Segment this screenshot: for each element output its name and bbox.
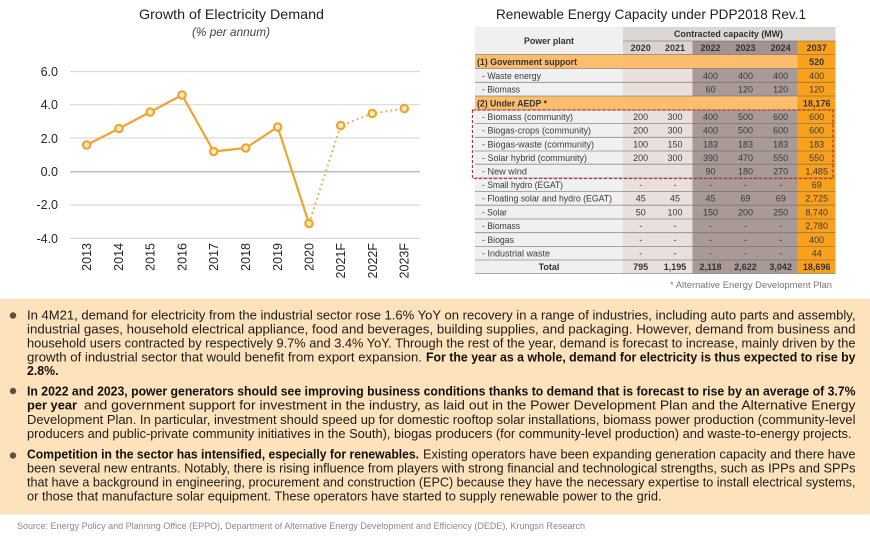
row: biomass community: 400 [703,112,718,122]
row: solar hybrid [482,153,824,163]
paragraph: 2022 and 2023 outlook: per year [27,398,77,413]
row: solar: 150 [703,207,718,217]
table header: 2021 [665,43,685,53]
y axis labels: 6.0 [41,65,58,79]
row: biomass AEDP: - [779,221,782,231]
row: biogas crops: - Biogas-crops (community) [482,126,591,136]
row: waste energy [482,71,824,81]
y axis labels: 0.0 [41,165,58,179]
row: biomass AEDP: - [744,221,747,231]
row: biomass: 120 [809,84,824,94]
x axis labels: 2019 [271,243,285,271]
row: biomass community: 600 [773,112,788,122]
paragraph: 4M21 demand: household users contracted by respectively 9.7% and 3.4% YoY. Through the rest of the year, demand is forecast to increase, mainly driven by the [27,335,856,350]
row: solar: 200 [738,207,753,217]
row: biomass AEDP: - [639,221,642,231]
x axis labels: 2016 [176,243,190,271]
row: biomass community: 300 [667,112,683,122]
chart title: (% per annum) [192,25,270,39]
row: waste energy: 400 [738,71,753,81]
row: biomass community: - Biomass (community) [482,112,573,122]
paragraph: 4M21 demand: growth of industrial sector that would benefit from export expansion. [27,349,422,364]
paragraph: 4M21 demand [10,307,856,378]
paragraph: 4M21 demand: In 4M21, demand for electricity from the industrial sector rose 1.6% YoY on recovery in a range of industries, including auto parts and assembly, [27,307,856,322]
row: waste energy: 400 [773,71,788,81]
row: government support [477,57,824,67]
row: biogas waste: 183 [703,139,718,149]
row: biomass AEDP: - [709,221,712,231]
row: biogas waste: 150 [667,139,683,149]
row: industrial waste: - [709,248,712,258]
row: biogas crops: 300 [667,126,683,136]
row: total: 795 [633,262,648,272]
table header: 2020 [631,43,651,53]
paragraph: competition [10,447,856,504]
row: solar hybrid: 550 [809,153,824,163]
row: solar: 100 [667,207,683,217]
paragraph: competition: that have a background in engineering, procurement and construction (EPC) because they have the necessary expertise to install electrical systems, [27,475,856,490]
x axis labels [80,243,412,278]
row: biogas crops: 600 [773,126,788,136]
row: biogas: 400 [809,235,824,245]
row: solar hybrid: 200 [633,153,648,163]
paragraph: competition: Existing operators have been expanding generation capacity and there have [423,447,856,462]
row: floating solar and hydro: 69 [776,194,786,204]
row: total: 18,696 [803,262,830,272]
row: small hydro: - [779,180,782,190]
x axis labels: 2020 [302,243,316,271]
row: small hydro: 69 [812,180,822,190]
row: solar: 50 [636,207,646,217]
row: floating solar and hydro: 69 [740,194,751,204]
row: new wind [482,166,828,176]
y axis labels [36,65,58,246]
row: new wind: 270 [773,166,788,176]
actual data line [87,95,309,224]
x axis labels: 2018 [239,243,253,271]
row: total: 1,195 [664,262,686,272]
row: small hydro: - Small hydro (EGAT) [482,180,563,190]
row: industrial waste: - Industrial waste [482,248,550,258]
row: solar hybrid: 550 [773,153,788,163]
row: waste energy: 400 [703,71,718,81]
row: biogas crops [482,126,824,136]
row: industrial waste [482,248,822,258]
y axis labels: -4.0 [36,232,58,246]
row: total [539,262,830,272]
row: biomass: 120 [773,84,788,94]
table header: Power plant [524,36,574,46]
row: biogas crops: 600 [809,126,824,136]
paragraph: 4M21 demand: 2.8%. [27,363,58,378]
row: total: 3,042 [769,262,792,272]
row: biomass: 120 [738,84,753,94]
paragraph: competition: or those that manufacture solar equipment. These operators have started to supply renewable power to the grid. [27,489,662,504]
row: industrial waste: - [744,248,747,258]
x axis labels: 2017 [207,243,221,271]
chart title: Growth of Electricity Demand [139,6,324,22]
row: biogas waste: 100 [633,139,648,149]
row: under AEDP [477,98,830,108]
x axis labels: 2023F [398,243,412,278]
table header: 2022 [700,43,721,53]
row: biomass: - Biomass [482,84,520,94]
row: biogas: - Biogas [482,235,514,245]
row: biomass: 60 [705,84,716,94]
forecast dotted line [309,108,404,224]
row: solar [482,207,828,217]
row: government support: (1) Government support [477,57,577,67]
row: biogas: - [709,235,712,245]
row: solar hybrid: 390 [703,153,718,163]
table header: 2023 [735,43,756,53]
row: biomass community: 600 [809,112,824,122]
row: small hydro: - [709,180,712,190]
source note: Source: Energy Policy and Planning Office (EPPO), Department of Alternative Energy Development and Efficiency (DEDE), Krungsri Research [17,521,585,532]
row: under AEDP: 18,176 [803,98,830,108]
row: biogas: - [639,235,642,245]
row: floating solar and hydro: 45 [636,194,646,204]
row: industrial waste: - [639,248,642,258]
y axis labels: 2.0 [41,132,58,146]
row: waste energy: - Waste energy [482,71,541,81]
row: biomass AEDP: - [674,221,676,231]
row: biomass community: 200 [633,112,648,122]
row: total: 2,622 [734,262,757,272]
paragraph: 4M21 demand: For the year as a whole, demand for electricity is thus expected to rise by [426,349,856,364]
row: small hydro: - [639,180,642,190]
row: small hydro [482,180,822,190]
row: new wind: 1,485 [805,166,828,176]
table title: Renewable Energy Capacity under PDP2018 Rev.1 [496,6,806,22]
row: floating solar and hydro [482,194,828,204]
row: solar hybrid: 470 [738,153,753,163]
row: new wind: 90 [705,166,716,176]
row: under AEDP: (2) Under AEDP * [477,98,547,108]
row: industrial waste: - [779,248,782,258]
row: industrial waste: - [674,248,676,258]
table header [524,29,827,53]
paragraph: competition: Competition in the sector has intensified, especially for renewables. [27,447,419,462]
paragraph: 2022 and 2023 outlook: producers and public-private community initiatives in the South), biogas producers (for community-level production) and waste-to-energy projects. [27,426,852,441]
row: biogas waste [482,139,824,149]
table header: 2037 [807,43,827,53]
row: small hydro: - [744,180,747,190]
table: renewable energy capacity [475,27,836,274]
row: biomass AEDP: - Biomass [482,221,520,231]
x axis labels: 2022F [366,243,380,278]
data point markers [83,91,408,227]
row: biogas: - [674,235,676,245]
x axis labels: 2013 [80,243,94,271]
row: floating solar and hydro: 2,725 [805,194,828,204]
x axis labels: 2021F [334,243,348,278]
row: biogas: - [744,235,747,245]
row: floating solar and hydro: - Floating solar and hydro (EGAT) [482,194,612,204]
row: biogas crops: 400 [703,126,718,136]
y axis labels: -2.0 [36,198,58,212]
row: biogas waste: - Biogas-waste (community) [482,139,594,149]
row: biogas: - [779,235,782,245]
row: solar: 8,740 [805,207,828,217]
row: floating solar and hydro: 45 [705,194,716,204]
row: government support: 520 [809,57,824,67]
row: total: Total [539,262,559,272]
table header: Contracted capacity (MW) [674,29,783,39]
paragraph: 2022 and 2023 outlook: Development Plan. In particular, investment should speed up for domestic rooftop solar installations, biomass power production (community-level [27,412,856,427]
row: biomass community [482,112,824,122]
paragraph: 2022 and 2023 outlook [10,384,856,441]
row: waste energy: 400 [809,71,824,81]
x axis labels: 2014 [112,243,126,271]
table header: 2024 [771,43,791,53]
row: floating solar and hydro: 45 [670,194,680,204]
chart title [139,6,324,39]
row: biogas waste: 183 [773,139,788,149]
row: biomass AEDP: 2,780 [805,221,828,231]
row: industrial waste: 44 [812,248,822,258]
y axis labels: 4.0 [41,98,58,112]
paragraph: competition: been several new entrants. Notably, there is rising influence from players with strong financial and technological strengths, such as IPPs and SPPs [27,461,856,476]
row: biomass community: 500 [738,112,753,122]
row: solar hybrid: - Solar hybrid (community) [482,153,587,163]
footnote: * Alternative Energy Development Plan [670,280,832,291]
row: biomass AEDP [482,221,828,231]
dashed highlight box [472,110,833,178]
x axis labels: 2015 [144,243,158,271]
panel: commentary [0,299,870,514]
row: new wind: - New wind [482,166,527,176]
row: biogas waste: 183 [738,139,753,149]
row: small hydro: - [674,180,676,190]
row: total: 2,118 [699,262,722,272]
paragraph: 4M21 demand: industrial gases, household electrical appliance, food and beverages, building supplies, and packaging. However, demand from business and [27,321,856,336]
line chart: growth of electricity demand [36,65,420,278]
row: solar: - Solar [482,207,507,217]
row: biogas crops: 200 [633,126,648,136]
row: solar hybrid: 300 [667,153,683,163]
row: biogas waste: 183 [809,139,824,149]
row: biogas crops: 500 [738,126,753,136]
row: biogas [482,235,824,245]
row: biomass [482,84,824,94]
row: solar: 250 [773,207,788,217]
paragraph: 2022 and 2023 outlook: and government support for investment in the industry, as laid out in the Power Development Plan and the Alternative Energy [84,398,856,413]
row: new wind: 180 [738,166,753,176]
